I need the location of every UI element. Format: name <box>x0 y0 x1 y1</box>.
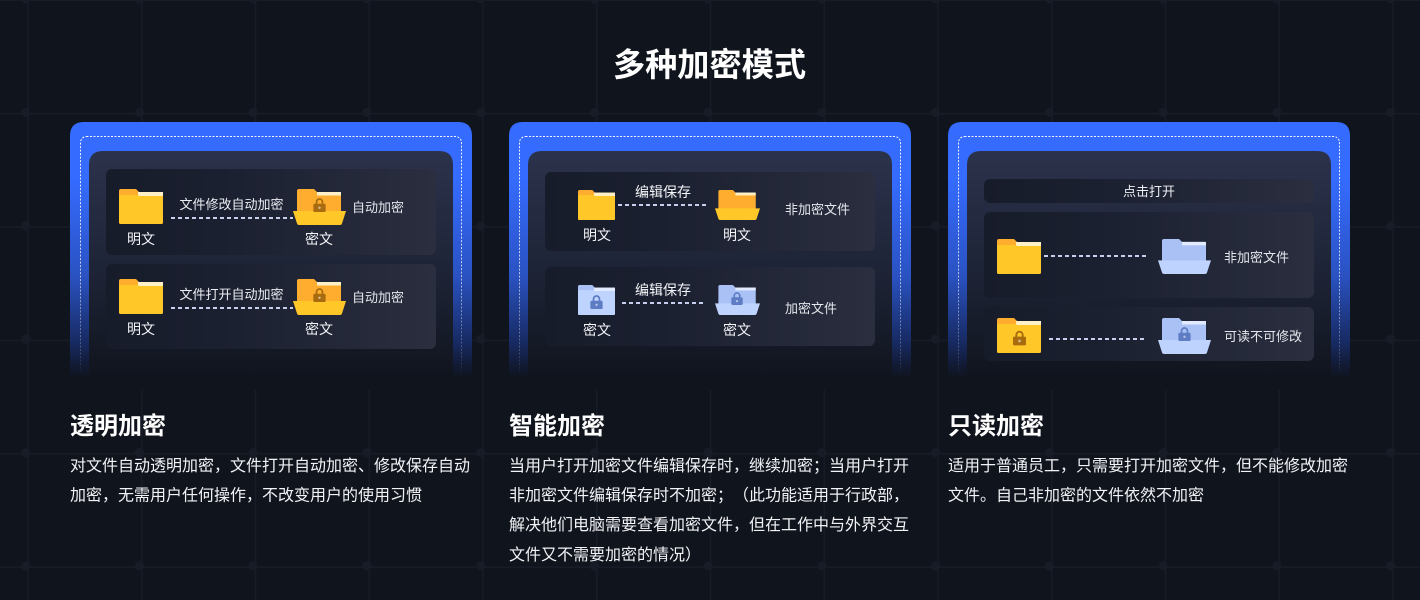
label: file modify: 文件修改自动加密 <box>179 197 284 212</box>
text block: smart description: 当用户打开加密文件编辑保存时，继续加密；当用户打开 <box>509 457 909 475</box>
label: encrypted file: 加密文件 <box>785 301 837 316</box>
icon: plain folder <box>997 239 1041 274</box>
label: plain text: 明文 <box>583 227 611 243</box>
row: click open <box>984 179 1314 203</box>
text block: smart description: 解决他们电脑需要查看加密文件，但在工作中与外界交互 <box>509 516 909 534</box>
row: file modify <box>106 169 436 255</box>
label: file open: 文件打开自动加密 <box>179 287 284 302</box>
icon: locked folder <box>997 318 1041 353</box>
text block: read only description <box>948 457 1348 504</box>
text block: read only description: 适用于普通员工，只需要打开加密文件，但不能修改加密 <box>948 457 1348 475</box>
panel: smart encryption <box>509 122 911 390</box>
label: cipher text: 密文 <box>723 322 751 338</box>
icon: encrypted open folder <box>293 279 346 315</box>
row: read only <box>984 307 1314 361</box>
label: plain text: 明文 <box>723 227 751 243</box>
label: non-encrypted file: 非加密文件 <box>1224 250 1289 265</box>
arrow: dashed link <box>618 204 707 206</box>
row: plain save <box>545 172 875 251</box>
text block: smart description <box>509 457 909 564</box>
row: non-encrypted <box>984 212 1314 298</box>
heading: read only: 只读加密 <box>948 412 1044 440</box>
icon: plain folder <box>578 190 615 220</box>
icon: locked open blue folder <box>1158 318 1211 354</box>
label: cipher text: 密文 <box>583 322 611 338</box>
arrow: dashed link <box>622 302 705 304</box>
arrow: dashed link <box>1049 338 1146 340</box>
icon: encrypted open folder <box>715 285 760 315</box>
arrow: dashed link <box>171 307 293 309</box>
text block: transparent description <box>70 457 470 504</box>
label: plain text: 明文 <box>127 321 155 337</box>
label: plain text: 明文 <box>127 231 155 247</box>
label: auto encrypt: 自动加密 <box>352 290 404 305</box>
label: auto encrypt: 自动加密 <box>352 200 404 215</box>
heading: transparent: 透明加密 <box>70 412 166 440</box>
text block: transparent description: 加密，无需用户任何操作，不改变用户的使用习惯 <box>70 486 422 504</box>
arrow: dashed link <box>171 217 293 219</box>
row: file open <box>106 264 436 349</box>
icon: encrypted folder <box>578 285 615 315</box>
icon: plain folder <box>119 189 163 224</box>
heading: smart: 智能加密 <box>509 412 605 440</box>
label: read only: 可读不可修改 <box>1224 329 1302 344</box>
label: edit save: 编辑保存 <box>635 282 691 298</box>
row: click open: 点击打开 <box>1123 184 1175 199</box>
label: non-encrypted file: 非加密文件 <box>785 202 850 217</box>
text block: transparent description: 对文件自动透明加密，文件打开自动加密、修改保存自动 <box>70 457 470 475</box>
text block: smart description: 非加密文件编辑保存时不加密；（此功能适用于行政部， <box>509 486 909 504</box>
title: 多种加密模式 <box>613 47 806 83</box>
label: cipher text: 密文 <box>305 231 333 247</box>
icon: open blue folder <box>1158 239 1211 274</box>
text block: read only description: 文件。自己非加密的文件依然不加密 <box>948 486 1204 504</box>
row: cipher save <box>545 267 875 346</box>
icon: plain folder <box>119 279 163 314</box>
icon: open folder <box>715 190 760 220</box>
panel: read-only encryption <box>948 122 1350 390</box>
icon: encrypted open folder <box>293 189 346 225</box>
arrow: dashed link <box>1044 255 1148 257</box>
panel: transparent encryption <box>70 122 472 390</box>
label: edit save: 编辑保存 <box>635 184 691 200</box>
label: cipher text: 密文 <box>305 321 333 337</box>
text block: smart description: 文件又不需要加密的情况） <box>509 546 701 564</box>
